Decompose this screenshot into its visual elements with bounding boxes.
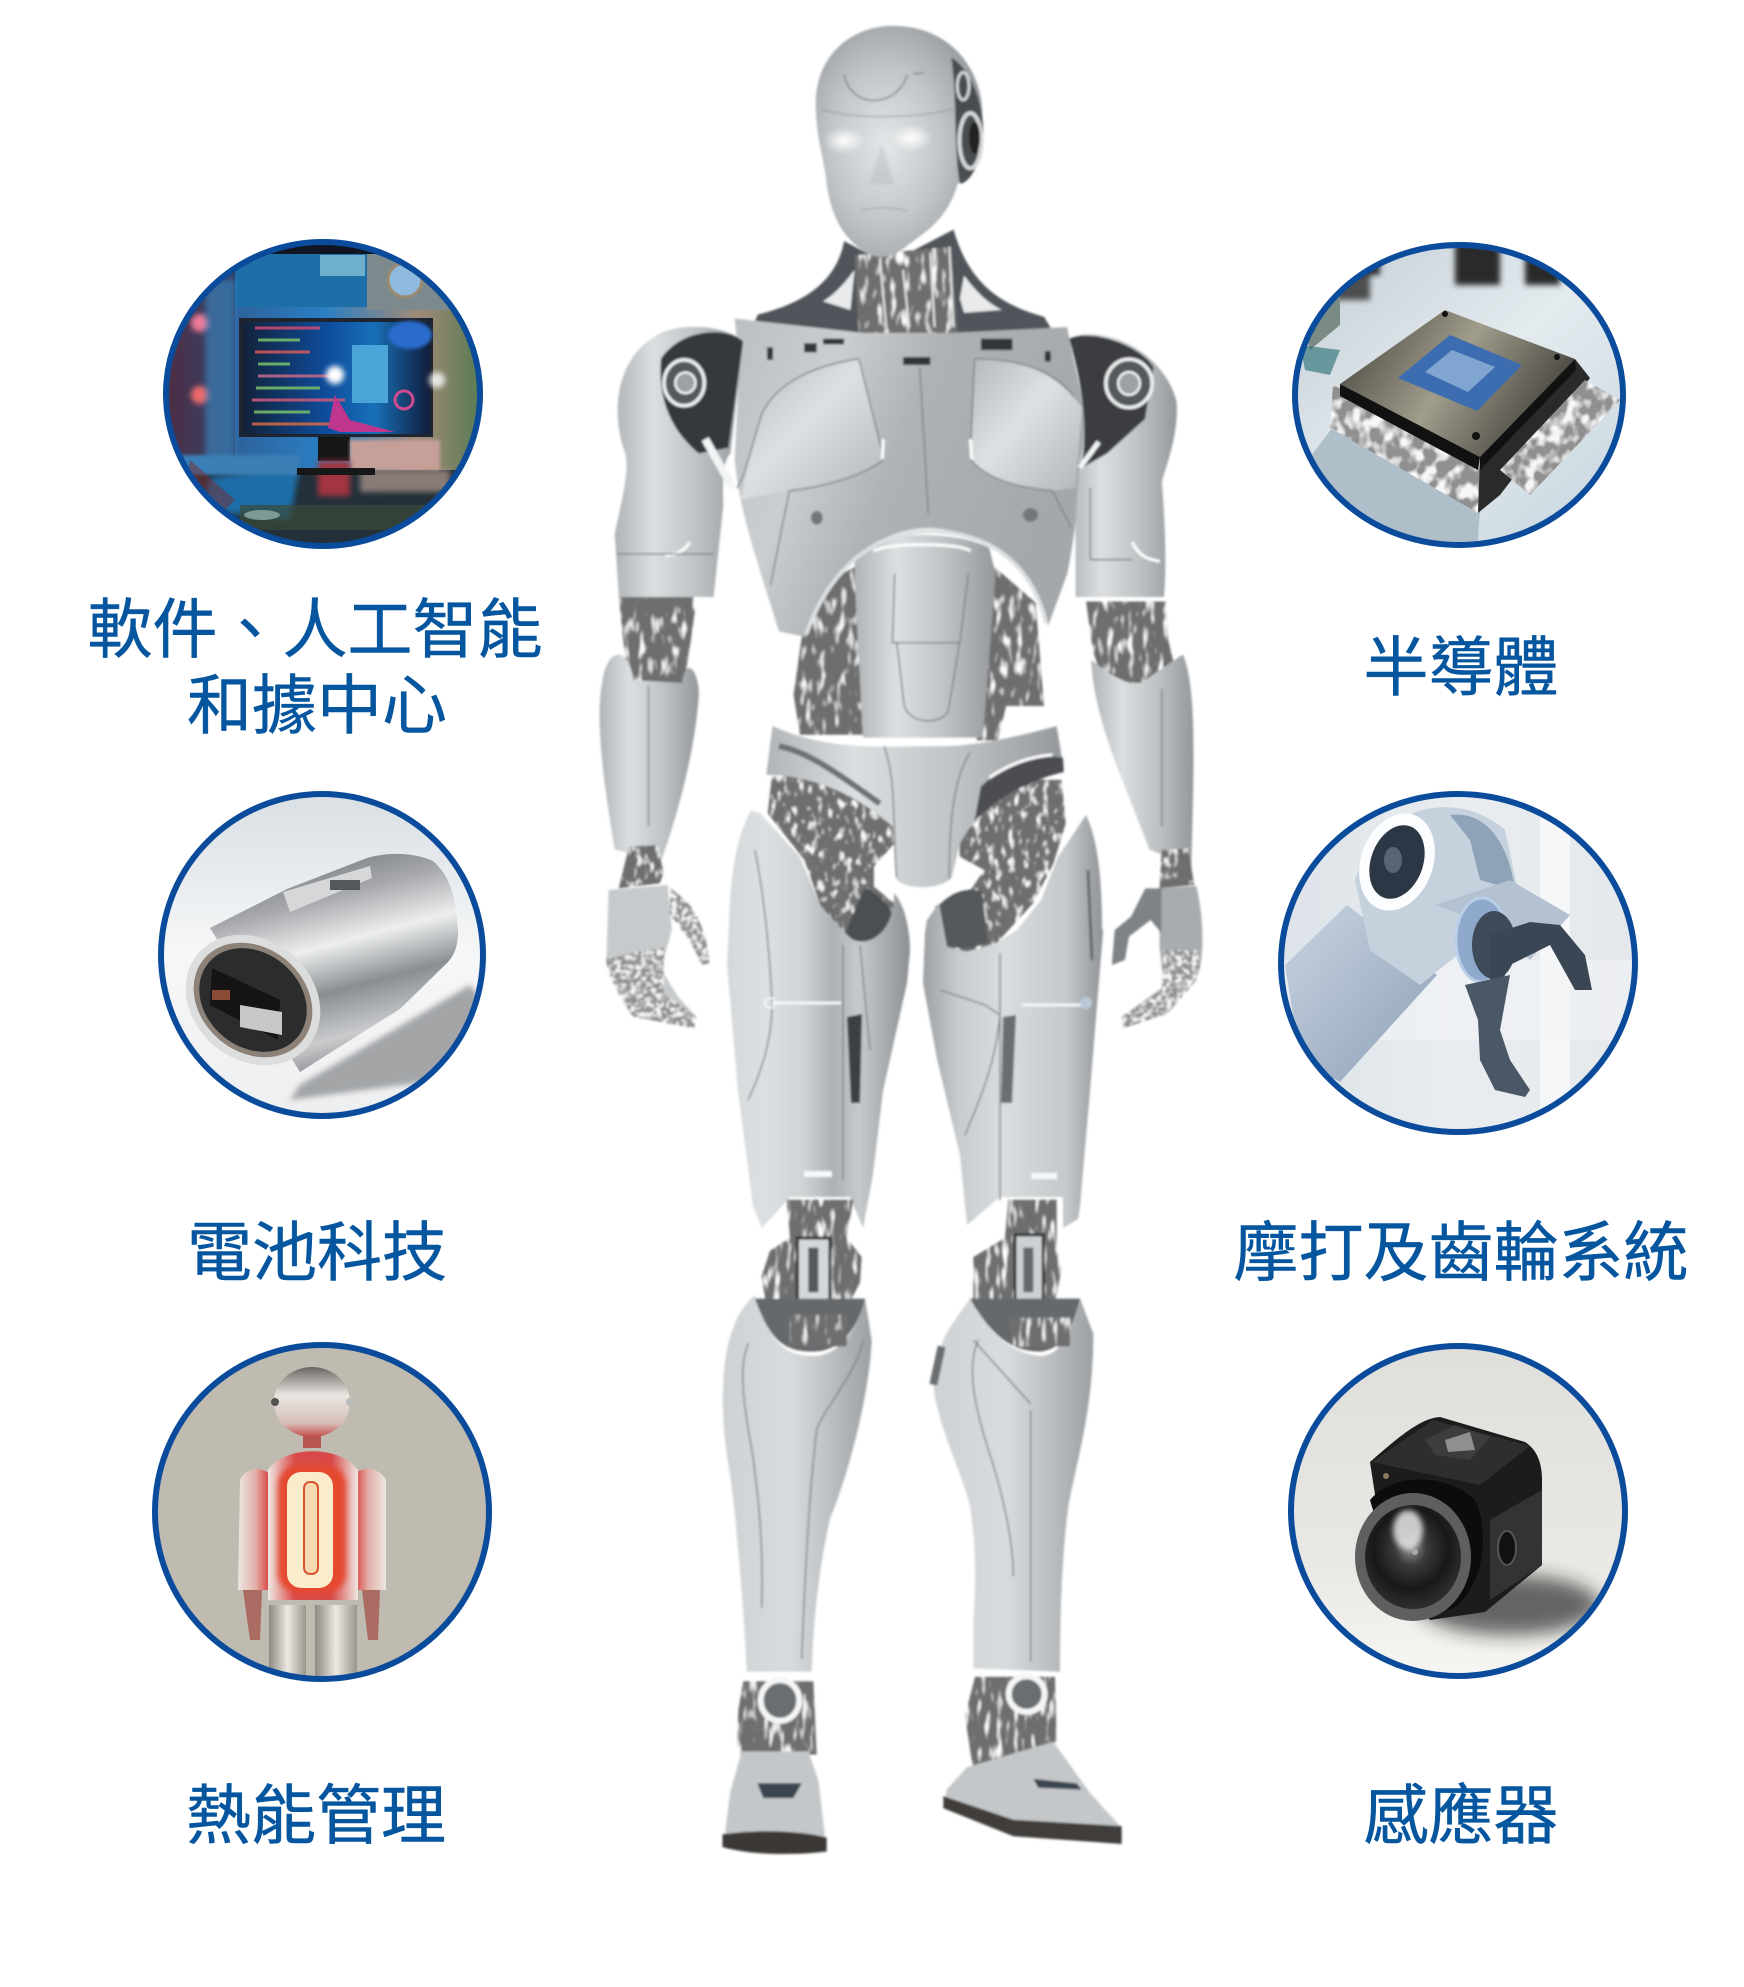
image: robot arm and gripper [1284, 797, 1632, 1129]
circle border: motor [1281, 794, 1635, 1132]
right knee joint [973, 1200, 1062, 1308]
circle border: semiconductors [1295, 245, 1623, 545]
right foot [943, 1742, 1122, 1844]
image: metal battery cell [164, 797, 480, 1113]
head [816, 26, 983, 257]
left elbow joint [619, 597, 697, 683]
panel: sensors [1280, 1338, 1635, 1852]
label: software, AI and data centres: 軟件、人工智能 [87, 593, 543, 666]
torso chest plate [735, 319, 1084, 637]
left knee joint [762, 1200, 862, 1308]
circle border: sensors [1291, 1346, 1625, 1676]
left foot [723, 1751, 827, 1854]
right forearm [1091, 654, 1194, 867]
image: computer monitor with code [169, 245, 477, 543]
label: battery technology: 電池科技 [187, 1216, 447, 1289]
panel: battery technology [150, 785, 495, 1289]
abdomen mechanics [794, 535, 1044, 740]
right hand [1112, 848, 1202, 1028]
panel: semiconductors [1285, 238, 1630, 704]
left ankle [737, 1680, 817, 1755]
left forearm [600, 655, 699, 861]
right arm [1069, 334, 1194, 867]
image: robot with glowing core [158, 1348, 486, 1676]
label: sensors: 感應器 [1363, 1779, 1559, 1852]
right shin [933, 1299, 1093, 1672]
label: software, AI and data centres [87, 593, 543, 742]
label: motor and gear systems: 摩打及齒輪系統 [1233, 1216, 1689, 1289]
left hand [606, 845, 709, 1028]
panel: thermal management [145, 1335, 500, 1852]
left thigh [727, 810, 910, 1228]
humanoid robot figure [600, 26, 1202, 1854]
right ankle [965, 1676, 1057, 1771]
circle border: battery [161, 794, 483, 1116]
panel: motor and gear systems [1233, 785, 1689, 1289]
circle border: thermal [155, 1345, 489, 1679]
right thigh [923, 815, 1103, 1228]
left arm [600, 327, 743, 861]
label: semiconductors: 半導體 [1363, 631, 1559, 704]
panel: software, AI and data centres [87, 235, 543, 742]
circle border: software [166, 242, 480, 546]
robot lower legs [723, 1200, 1122, 1854]
robot upper body [600, 26, 1194, 887]
neck mechanics [745, 230, 1061, 344]
hands [606, 845, 1202, 1028]
pelvis [766, 726, 1064, 887]
image: camera sensor [1294, 1349, 1622, 1673]
label: software, AI and data centres: 和據中心 [187, 669, 447, 742]
right elbow joint [1086, 602, 1179, 683]
hip mechanics [768, 773, 1066, 952]
image: microchip [1298, 248, 1620, 542]
left shin [723, 1295, 872, 1672]
label: thermal management: 熱能管理 [186, 1779, 446, 1852]
